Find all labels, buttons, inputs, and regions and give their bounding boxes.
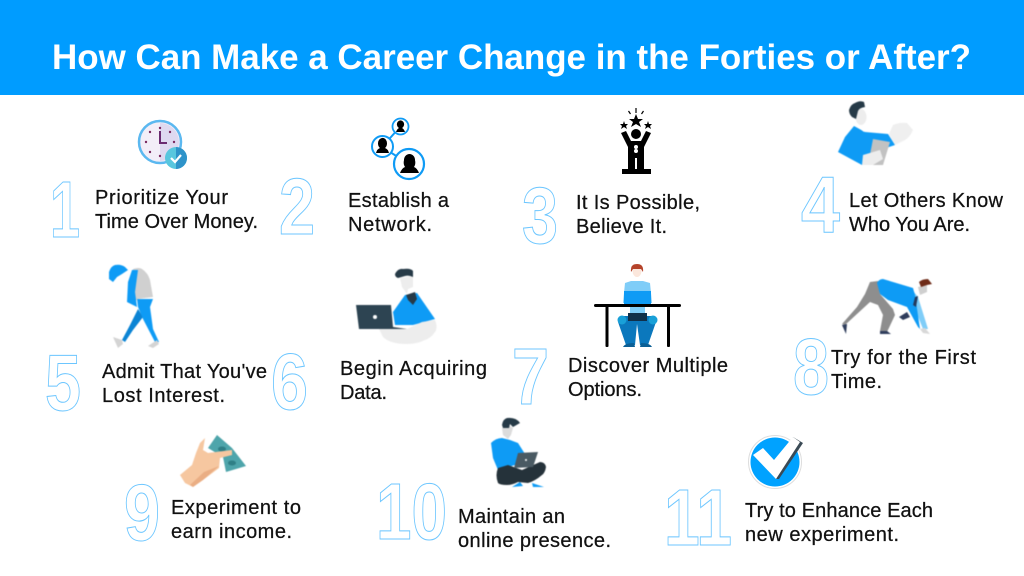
label 3 [576,192,700,238]
label 8: Try for the First [831,347,976,369]
label 8 [831,347,976,393]
label 10: online presence. [458,530,611,552]
number 6: 6 [271,337,308,426]
item 6 [271,269,487,426]
label 2: Establish a [348,190,450,212]
item 4 [801,101,1004,249]
number 11: 11 [664,473,732,562]
number 3: 3 [522,171,558,260]
label 11: new experiment. [745,524,899,546]
label 10 [458,506,611,552]
icon: network of people [372,118,424,179]
label 3: Believe It. [576,216,667,238]
item 1 [50,121,258,254]
number 5: 5 [45,338,81,427]
item 3 [522,108,700,260]
label 5 [102,361,267,407]
number 1: 1 [50,165,80,254]
icon: achiever with stars [620,108,652,174]
number 10: 10 [376,467,447,556]
icon: clock with check badge [139,121,187,169]
label 4: Who You Are. [849,214,970,236]
label 9: Experiment to [171,497,301,519]
label 11 [745,500,933,546]
label 2: Network. [348,214,432,236]
item 5 [45,265,267,427]
number 4: 4 [801,160,840,249]
label 3: It Is Possible, [576,192,700,214]
item 9 [124,435,301,557]
label 5: Admit That You've [102,361,267,383]
icon: man at laptop [356,269,436,344]
label 7 [568,355,728,401]
number 8: 8 [793,322,829,411]
icon: man sitting with laptop [491,418,546,487]
item 11 [664,436,933,562]
number 2: 2 [279,162,315,251]
label 2 [348,190,450,236]
icon: person at desk [594,264,681,347]
item 2 [279,118,450,251]
item 8 [793,279,976,411]
icon: man with tablet [838,101,913,165]
icon: check mark badge [748,436,803,488]
label 1: Prioritize Your [95,187,228,209]
label 8: Time. [831,371,882,393]
label 7: Options. [568,379,642,401]
label 5: Lost Interest. [102,385,225,407]
label 10: Maintain an [458,506,565,528]
header banner [0,0,1024,95]
item 10 [376,418,611,556]
label 4: Let Others Know [849,190,1004,212]
item 7 [512,264,728,421]
label 1: Time Over Money. [95,211,258,233]
label 11: Try to Enhance Each [745,500,933,522]
title: How Can Make a Career Change in the Forties or After? [52,38,971,77]
number 7: 7 [512,332,549,421]
label 1 [95,187,258,233]
label 6: Begin Acquiring [340,358,487,380]
label 7: Discover Multiple [568,355,728,377]
icon: hand holding money [180,435,246,487]
label 6 [340,358,487,404]
icon: man in starting crouch [842,279,932,334]
label 6: Data. [340,382,387,404]
label 4 [849,190,1004,236]
number 9: 9 [124,468,160,557]
icon: dejected walking person [109,265,159,348]
label 9: earn income. [171,521,292,543]
label 9 [171,497,301,543]
